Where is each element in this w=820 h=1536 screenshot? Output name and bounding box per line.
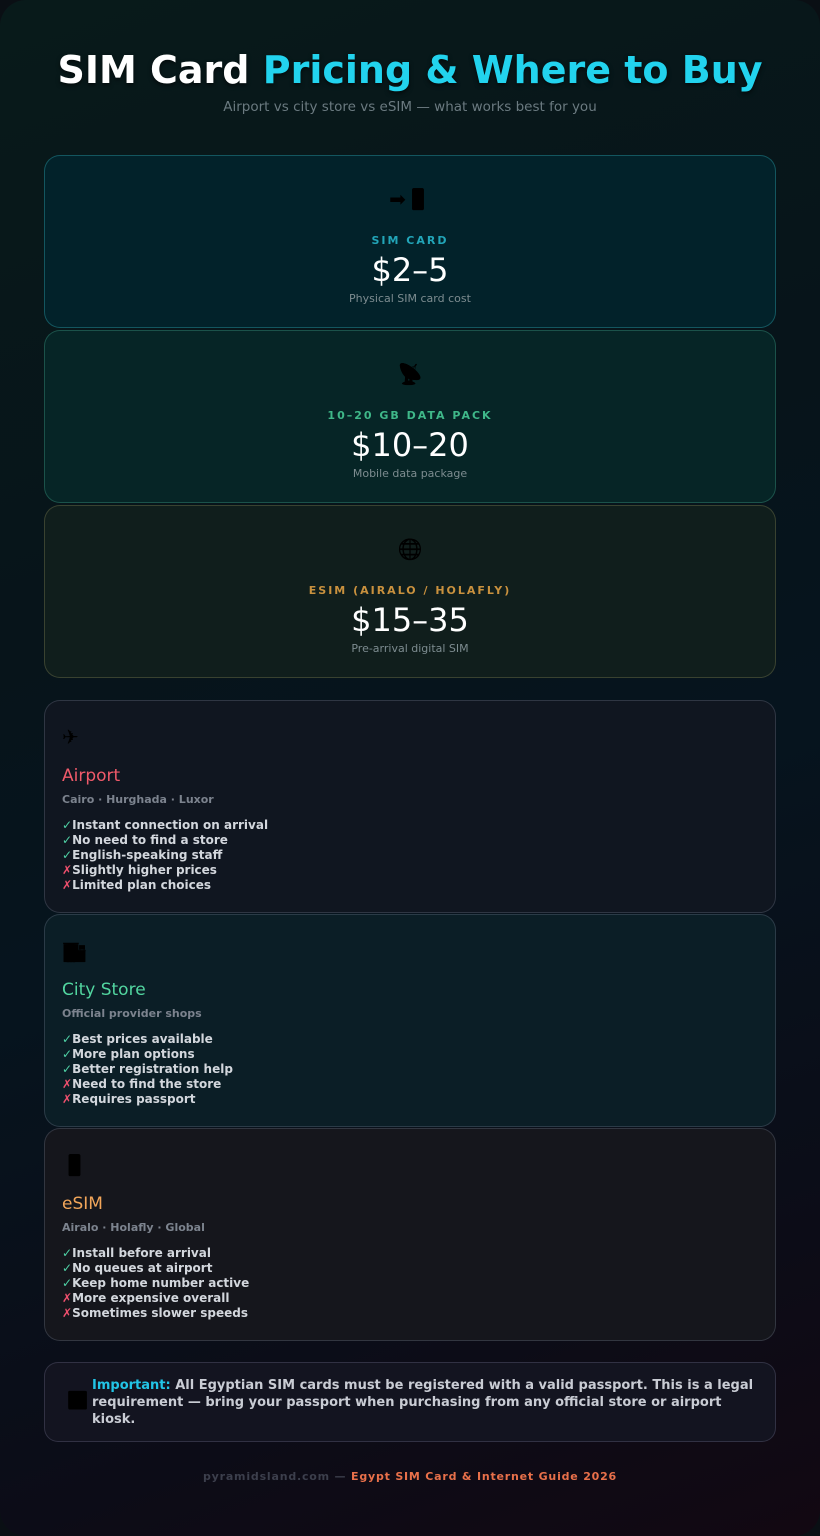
description: Mobile data package (353, 467, 467, 480)
note text: Important: All Egyptian SIM cards must be registered with a valid passport. This is a legal requirement — bring your passport when purchasing from any official store or airport kiosk. (92, 1378, 753, 1427)
locations: Cairo · Hurghada · Luxor (62, 793, 214, 806)
label: SIM CARD (372, 234, 448, 247)
icon: mobile: 📱 (62, 1153, 87, 1177)
locations: Airalo · Holafly · Global (62, 1221, 205, 1234)
panel: esim price (44, 505, 776, 678)
icon: phone: ➡📱 (389, 187, 431, 211)
pros and cons: ✓No need to find a store (62, 833, 228, 847)
heading: eSIM (62, 1194, 103, 1214)
icon: plane: ✈ (62, 725, 79, 749)
pros and cons: ✗Requires passport (62, 1092, 196, 1106)
locations: Official provider shops (62, 1007, 202, 1020)
pros and cons: ✗Slightly higher prices (62, 863, 217, 877)
pros and cons: ✓No queues at airport (62, 1261, 212, 1275)
pros and cons: ✓More plan options (62, 1047, 195, 1061)
callout: important note (44, 1362, 776, 1442)
pros and cons (62, 1246, 249, 1320)
description: Physical SIM card cost (349, 292, 471, 305)
pros and cons: ✓Instant connection on arrival (62, 818, 268, 832)
pros and cons (62, 818, 268, 892)
panel: airport (44, 700, 776, 913)
icon: globe: 🌐 (398, 537, 422, 561)
heading: Airport (62, 766, 120, 786)
pros and cons: ✓Keep home number active (62, 1276, 249, 1290)
pros and cons (62, 1032, 233, 1106)
pros and cons: ✓Install before arrival (62, 1246, 211, 1260)
label: 10–20 GB DATA PACK (327, 409, 493, 422)
title: SIM Card Pricing & Where to Buy (57, 48, 763, 92)
icon: satellite: 📡 (398, 362, 422, 386)
panel: sim card price (44, 155, 776, 328)
pros and cons: ✓Best prices available (62, 1032, 213, 1046)
heading: City Store (62, 980, 146, 1000)
pros and cons: ✓English-speaking staff (62, 848, 222, 862)
price: $15–35 (351, 601, 469, 639)
price: $10–20 (351, 426, 469, 464)
subtitle: Airport vs city store vs eSIM — what works best for you (223, 99, 597, 115)
panel: esim (44, 1128, 776, 1341)
pros and cons: ✗Sometimes slower speeds (62, 1306, 248, 1320)
panel: city store (44, 914, 776, 1127)
icon: building: 🏬 (62, 939, 87, 963)
icon: passport: 🛂 (67, 1391, 88, 1411)
price: $2–5 (371, 251, 449, 289)
pros and cons: ✗More expensive overall (62, 1291, 229, 1305)
label: ESIM (AIRALO / HOLAFLY) (309, 584, 511, 597)
footer: pyramidsland.com — Egypt SIM Card & Internet Guide 2026 (203, 1470, 617, 1483)
pros and cons: ✓Better registration help (62, 1062, 233, 1076)
panel: data pack price (44, 330, 776, 503)
description: Pre-arrival digital SIM (351, 642, 469, 655)
pros and cons: ✗Limited plan choices (62, 878, 211, 892)
pros and cons: ✗Need to find the store (62, 1077, 221, 1091)
